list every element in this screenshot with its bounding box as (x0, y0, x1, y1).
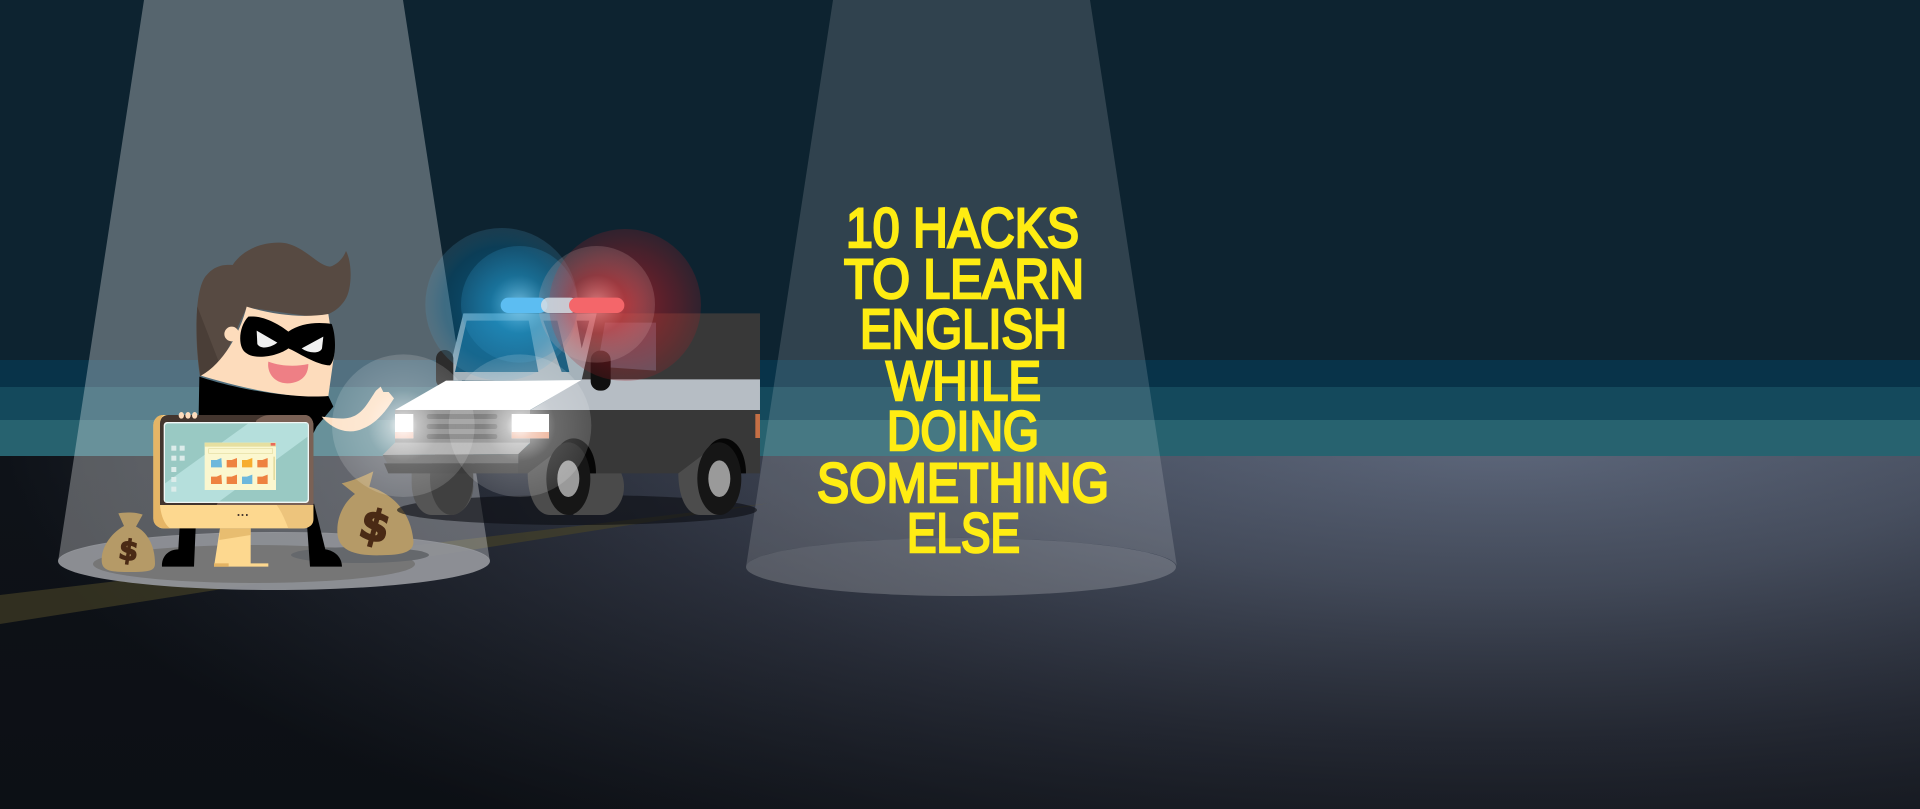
red siren glow inner (538, 246, 655, 363)
red siren glow outer (549, 229, 701, 381)
torso (198, 377, 333, 433)
fingers (179, 412, 197, 419)
right spotlight pool (746, 538, 1176, 596)
screen glass (165, 423, 308, 502)
truck ground shadow (397, 495, 757, 525)
screen reflection (165, 423, 308, 502)
money bag: large: $ (354, 499, 396, 555)
rear wheel (678, 442, 741, 515)
screen (164, 422, 309, 503)
truck body upper (580, 313, 760, 380)
truck front face (395, 410, 530, 443)
title: ELSE (907, 501, 1020, 564)
character: thief (162, 243, 394, 567)
right spotlight beam (746, 0, 1177, 567)
money bag: small: $ (117, 533, 141, 568)
hair shading (197, 307, 221, 376)
left spotlight beam (58, 0, 490, 562)
computer monitor (153, 412, 313, 567)
night sky (0, 0, 1920, 360)
thief floor shadow (93, 545, 415, 583)
left spotlight pool (58, 532, 490, 590)
monitor bezel (160, 415, 313, 505)
title: ENGLISH (860, 297, 1067, 360)
right headlight glow (449, 354, 591, 497)
mouth (268, 362, 308, 383)
blue siren glow outer (425, 228, 578, 381)
truck side window (597, 323, 656, 371)
rear marker light (755, 414, 760, 438)
horizon colour bands (0, 360, 1920, 457)
wheel arches (550, 438, 746, 473)
light bar (501, 298, 624, 313)
truck side stripe (530, 379, 760, 410)
front wheel (528, 442, 590, 515)
casing shading (153, 415, 313, 528)
monitor buttons (238, 514, 248, 516)
title: WHILE (886, 349, 1041, 412)
mask (240, 316, 335, 365)
eyes (257, 331, 323, 352)
file window (205, 443, 276, 490)
police truck (383, 313, 760, 515)
bezel highlight (217, 415, 313, 505)
face (201, 307, 334, 397)
truck hood (395, 380, 581, 410)
money bag: large (337, 471, 413, 555)
grille bars (427, 414, 497, 439)
headlight left (395, 414, 413, 438)
title (817, 196, 1109, 564)
far wheels (412, 442, 624, 515)
windshield glass (455, 321, 589, 372)
desktop icons (171, 446, 185, 492)
title: 10 HACKS (846, 196, 1079, 259)
siren and headlight glows (332, 228, 701, 497)
money bag shadow (291, 547, 429, 563)
money bag: small (102, 512, 155, 572)
arm (322, 387, 394, 431)
headlight right (512, 414, 549, 438)
title: DOING (887, 399, 1039, 462)
title: SOMETHING (817, 451, 1109, 514)
folder icons (211, 458, 268, 484)
road surface (0, 456, 1920, 809)
bumper (383, 443, 530, 473)
monitor casing (153, 415, 313, 528)
road centre stripe (0, 503, 770, 624)
monitor stand (214, 528, 268, 567)
side mirror: near (591, 351, 611, 391)
blue siren glow inner (461, 246, 578, 363)
legs (162, 503, 342, 567)
left headlight glow (332, 354, 475, 497)
side mirror: far (436, 350, 453, 388)
title: TO LEARN (844, 247, 1084, 310)
ear (224, 327, 239, 341)
truck body lower (518, 410, 760, 473)
hair (196, 243, 351, 377)
windshield frame (447, 313, 597, 380)
